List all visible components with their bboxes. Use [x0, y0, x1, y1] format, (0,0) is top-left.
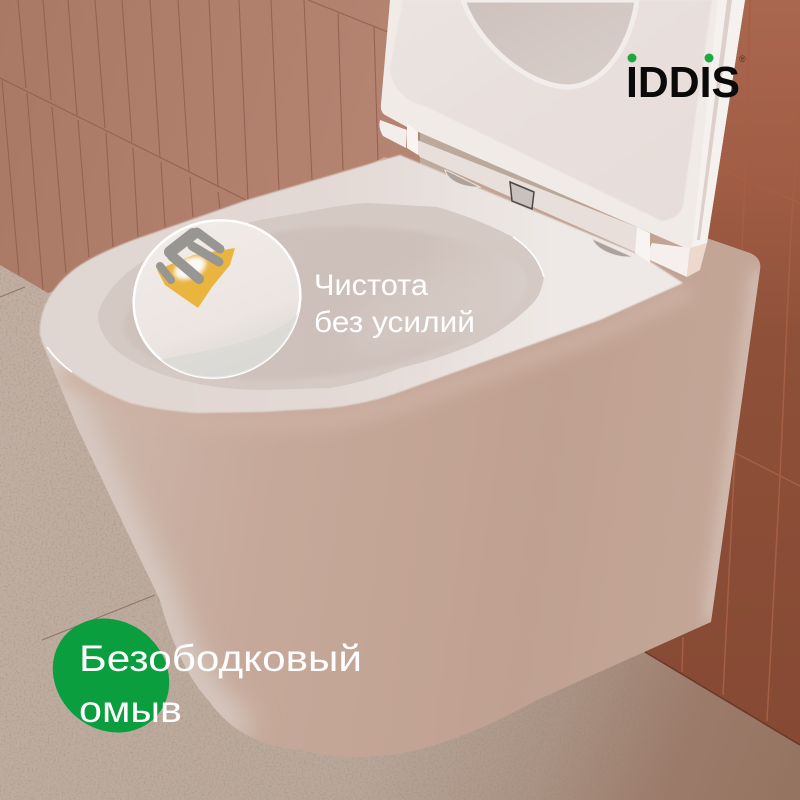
lid side strip: [692, 0, 745, 248]
magnifier lens: [132, 219, 302, 379]
hinge bar: [379, 120, 707, 277]
chrome latch: [510, 182, 534, 209]
heading: Безободковый омыв: Безободковый: [79, 638, 362, 679]
icon: yellow sponge: [157, 248, 235, 308]
heading: Безободковый омыв: омыв: [79, 689, 182, 730]
logo: IDDIS: ®: [739, 54, 746, 64]
bowl: [98, 203, 544, 390]
right wall tiles: [645, 0, 800, 745]
callout text: Чистота без усилий: без усилий: [314, 306, 475, 339]
green blob: [30, 595, 192, 756]
toilet rim: [40, 155, 683, 413]
seat opening: [463, 0, 637, 87]
toilet body: [41, 157, 760, 757]
lid inner tray: [390, 0, 712, 221]
callout text: Чистота без усилий: Чистота: [314, 269, 428, 302]
heading: Безободковый омыв: [79, 638, 362, 730]
callout text: Чистота без усилий: [314, 269, 475, 339]
left wall tiles: [0, 0, 420, 293]
chrome hinge fittings: [445, 170, 633, 257]
icon: gray glove: [160, 232, 220, 280]
logo: IDDIS: IDDIS: [626, 58, 740, 107]
seat lid: [381, 0, 745, 250]
